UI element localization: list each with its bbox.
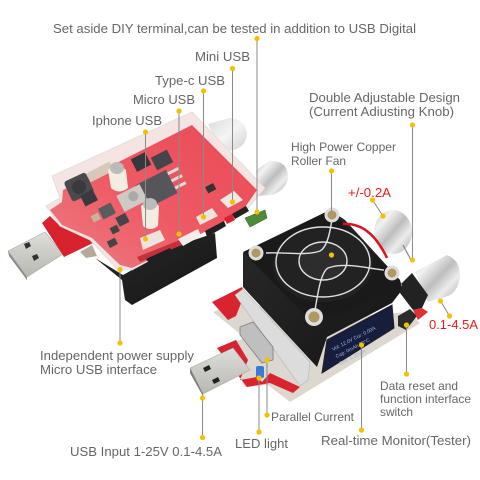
callout: Mini USB	[195, 49, 250, 205]
callout: Data reset switch: Data reset and	[380, 379, 458, 393]
left device fan	[95, 233, 217, 305]
OLED display: Cap: 0mAh 30°C	[335, 337, 371, 360]
callout: Micro USB: Micro USB	[133, 92, 195, 107]
fan top face	[243, 210, 402, 326]
callout: Data reset switch: switch	[380, 405, 413, 419]
left device knobs	[208, 118, 288, 196]
USB A female port	[240, 322, 273, 363]
red circuit board corner	[212, 287, 245, 320]
right device: electronic load tester	[190, 208, 460, 402]
callout: +/-0.2A	[348, 185, 391, 219]
left USB plug	[8, 232, 63, 280]
callout: DIY terminal	[53, 21, 416, 215]
callout: Micro USB	[133, 92, 195, 237]
callout: Type-c USB: Type-c USB	[155, 73, 225, 88]
OLED display: Vol: 12.0V Cur: 0.00A	[331, 325, 377, 353]
base plate	[213, 300, 420, 402]
callout: +/-0.2A: +/-0.2A	[348, 185, 391, 200]
callout: Mini USB: Mini USB	[195, 49, 250, 64]
left red wing board	[42, 216, 93, 257]
callout: 0.1-4.5A	[429, 298, 478, 332]
callout: Double adjustable design: (Current Adiusting Knob)	[309, 104, 454, 119]
callout: 0.1-4.5A: 0.1-4.5A	[429, 317, 478, 332]
fan rotor	[273, 226, 373, 302]
callout: Real-time Monitor	[321, 342, 471, 448]
callout: Real-time Monitor: Real-time Monitor(Tester)	[321, 433, 471, 448]
callout: Copper roller fan: Roller Fan	[291, 154, 346, 168]
red fan wire	[343, 224, 387, 258]
OLED display: Ene: 0.00Wh	[338, 348, 367, 367]
callout: LED light: LED light	[235, 436, 288, 451]
back knob	[374, 210, 412, 262]
left device connectors	[137, 191, 249, 263]
callout: Double adjustable design	[309, 90, 460, 263]
fan wire guard	[266, 218, 384, 310]
callout: USB input: USB Input 1-25V 0.1-4.5A	[70, 444, 222, 459]
callout: Parallel Current	[264, 357, 355, 424]
fan screws	[248, 208, 400, 326]
callout: Iphone USB	[92, 113, 162, 242]
callout: Data reset switch	[380, 322, 471, 419]
callout: Copper roller fan: High Power Copper	[291, 140, 396, 154]
left device: acrylic cased module	[8, 112, 288, 305]
circuit board components	[63, 150, 216, 248]
callout: DIY terminal: Set aside DIY terminal,can be tested in addition to USB Digital	[53, 21, 416, 36]
blue LED	[256, 366, 264, 378]
heat sink	[235, 289, 310, 386]
green screw terminal	[245, 210, 267, 227]
callout: Type-c USB	[155, 73, 225, 220]
OLED display	[322, 305, 394, 373]
callout: Independent power supply: Micro USB interface	[40, 362, 157, 377]
red circuit board strips	[217, 340, 300, 393]
callout: LED light	[235, 375, 288, 451]
callout: USB input	[70, 395, 222, 459]
white standoff posts	[108, 162, 159, 229]
callout: Data reset switch: function interface	[380, 392, 471, 406]
metal bracket under board	[80, 245, 97, 258]
callout: Parallel Current: Parallel Current	[271, 410, 355, 424]
callout: Double adjustable design: Double Adjustable Design	[309, 90, 460, 105]
acrylic plate	[46, 112, 265, 270]
callout: Iphone USB: Iphone USB	[92, 113, 162, 128]
right USB plug	[190, 348, 250, 398]
front knob and switch housing	[398, 255, 460, 330]
circuit board	[50, 125, 257, 268]
callout: Independent power supply	[40, 267, 194, 377]
callout: Copper roller fan	[291, 140, 396, 258]
callout: Independent power supply: Independent power supply	[40, 348, 194, 363]
fan body	[243, 210, 402, 367]
